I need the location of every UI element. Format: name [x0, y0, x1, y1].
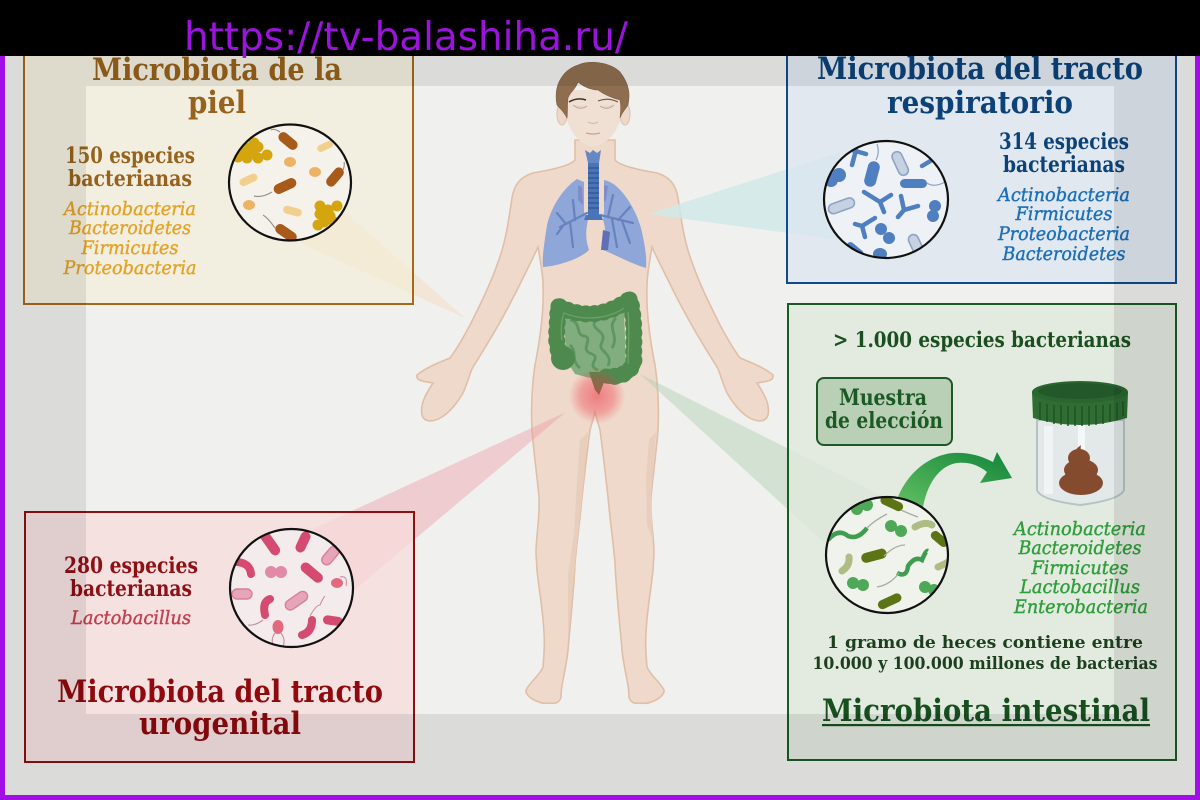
panel: gut microbiota — [788, 304, 1176, 760]
top black banner with URL — [0, 0, 1200, 60]
heading: respiratory: Microbiota del tracto — [817, 51, 1143, 87]
panel: skin microbiota — [24, 40, 413, 304]
heading: skin: Microbiota de la — [92, 52, 342, 88]
beam: gut — [640, 374, 880, 548]
magnifier: urogenital bacteria — [230, 529, 353, 647]
species count: gut: > 1.000 especies bacterianas — [833, 327, 1131, 352]
species list: skin: Proteobacteria — [63, 257, 197, 279]
beam: respiratory — [648, 152, 840, 240]
beam: urogenital — [300, 412, 566, 592]
heading: gut: Microbiota intestinal — [822, 693, 1150, 729]
heading: urogenital — [57, 674, 383, 742]
species list: respiratory — [996, 184, 1130, 265]
icon: stool sample jar — [1032, 381, 1128, 505]
lungs and trachea — [543, 150, 646, 268]
species count: urogenital: bacterianas — [70, 576, 192, 602]
species count: skin: 150 especies — [65, 143, 195, 169]
heading: respiratory — [817, 51, 1143, 121]
species count: urogenital — [64, 553, 198, 602]
panel: respiratory microbiota — [787, 40, 1176, 283]
species count: respiratory — [999, 129, 1129, 178]
magnifier: skin bacteria — [229, 124, 351, 244]
species count: urogenital: 280 especies — [64, 553, 198, 579]
heading: skin: piel — [188, 85, 246, 121]
species list: respiratory: Firmicutes — [1015, 203, 1113, 225]
heading: urogenital: urogenital — [139, 706, 301, 742]
species count: skin: bacterianas — [68, 166, 192, 192]
species list: gut: Firmicutes — [1031, 557, 1129, 579]
species list: gut: Enterobacteria — [1013, 596, 1148, 618]
species list: gut — [1012, 518, 1148, 618]
heading: skin — [92, 52, 342, 121]
species count: respiratory: 314 especies — [999, 129, 1129, 155]
species list: skin: Bacteroidetes — [68, 217, 191, 239]
arrow: bacteria to jar — [898, 452, 1012, 507]
species list: skin: Firmicutes — [81, 237, 179, 259]
top black banner with URL: https://tv-balashiha.ru/ — [184, 15, 629, 60]
species count: skin — [65, 143, 195, 192]
panel: urogenital microbiota — [25, 512, 414, 762]
species list: respiratory: Actinobacteria — [996, 184, 1130, 206]
species list: respiratory: Bacteroidetes — [1002, 243, 1126, 265]
species list: gut: Actinobacteria — [1012, 518, 1146, 540]
magnifier: respiratory bacteria — [824, 141, 948, 260]
callout: sample of choice: de elección — [825, 408, 943, 434]
callout: sample of choice: Muestra — [839, 385, 927, 411]
callout: sample of choice — [817, 378, 952, 445]
human body figure — [417, 62, 773, 703]
species list: skin: Actinobacteria — [62, 198, 196, 220]
species list: respiratory: Proteobacteria — [997, 223, 1130, 245]
leg shading — [568, 432, 656, 640]
species list: gut: Lactobacillus — [1019, 576, 1140, 598]
heading: respiratory: respiratorio — [887, 85, 1073, 121]
note: bacteria per gram: 10.000 y 100.000 millones de bacterias — [812, 654, 1158, 674]
note: bacteria per gram — [812, 633, 1158, 674]
note: bacteria per gram: 1 gramo de heces contiene entre — [827, 633, 1143, 653]
species list: gut: Bacteroidetes — [1018, 537, 1142, 559]
species list: skin — [62, 198, 196, 279]
intestines — [551, 299, 634, 395]
beam: skin — [300, 212, 465, 318]
heading: urogenital: Microbiota del tracto — [57, 674, 383, 710]
species list: urogenital: Lactobacillus — [70, 607, 191, 629]
head and face — [556, 62, 630, 146]
urogenital glow — [569, 368, 625, 424]
species count: respiratory: bacterianas — [1003, 152, 1125, 178]
magnifier: gut bacteria — [826, 494, 950, 613]
